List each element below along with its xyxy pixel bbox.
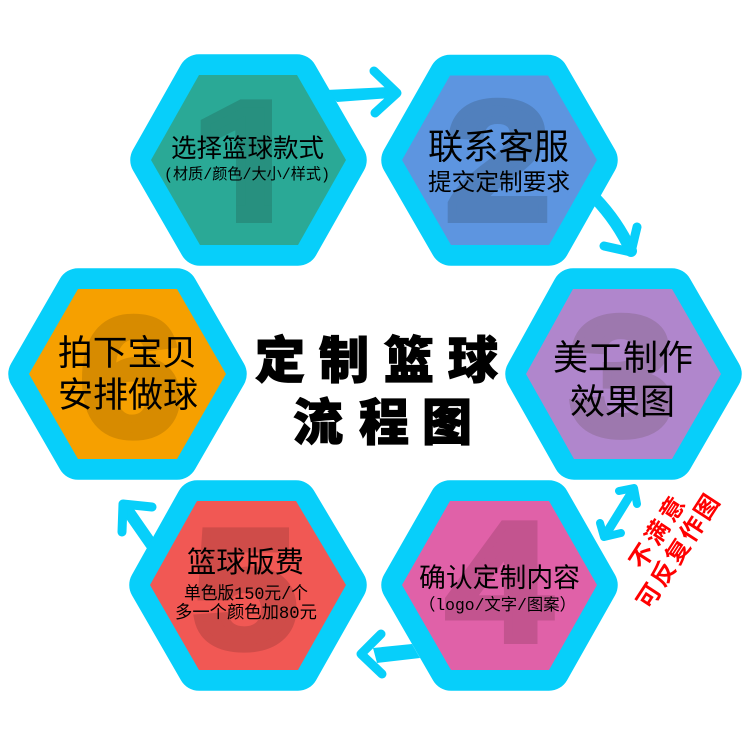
title: 定制篮球 — [255, 321, 498, 393]
heading: step 3 line 2: 效果图 — [570, 383, 675, 422]
arrow: step 5 to 6 — [122, 504, 152, 544]
big number 4: 4 — [447, 488, 551, 676]
arrow: double-headed between step 3 and 4 — [600, 488, 637, 537]
big number 1: 1 — [191, 68, 308, 255]
big number 5: 5 — [193, 495, 297, 683]
heading: step 4: 确认定制内容 — [419, 563, 580, 593]
big number 3: 3 — [570, 282, 674, 470]
panel: step 5 basketball plate fee — [150, 495, 346, 683]
panel: step 3 artwork design — [526, 282, 721, 470]
heading: step 2: 联系客服 — [428, 128, 569, 167]
arrow: step 1 to 2 — [326, 71, 397, 113]
text: step 1 details: (材质/颜色/大小/样式) — [164, 165, 330, 184]
arrow: step 2 to 3 — [595, 198, 637, 252]
panel: step 6 place order — [29, 284, 226, 471]
title: 流程图 — [293, 383, 472, 455]
text: step 5 price line 1: 单色版150元/个 — [184, 584, 308, 605]
arrow: step 4 to 5 — [361, 634, 420, 674]
text: step 2 details: 提交定制要求 — [428, 169, 570, 195]
title — [255, 321, 498, 455]
panel: step 4 confirm content — [402, 488, 597, 676]
text: step 5 price line 2: 多一个颜色加80元 — [175, 603, 317, 624]
heading: step 6 line 2: 安排做球 — [58, 376, 198, 415]
heading: step 3 line 1: 美工制作 — [553, 339, 693, 378]
big number 6: 6 — [80, 284, 182, 471]
heading: step 5: 篮球版费 — [187, 546, 304, 579]
callout: repeat revisions note: 不满意 — [619, 485, 694, 575]
big number 2: 2 — [446, 67, 550, 255]
heading: step 1: 选择篮球款式 — [171, 135, 324, 163]
panel: step 1 select style — [151, 68, 346, 255]
heading: step 6 line 1: 拍下宝贝 — [58, 334, 197, 373]
callout: repeat revisions note: 可反复作图 — [626, 484, 728, 614]
panel: step 2 contact support — [402, 67, 597, 255]
text: step 4 details: （logo/文字/图案） — [419, 595, 576, 615]
